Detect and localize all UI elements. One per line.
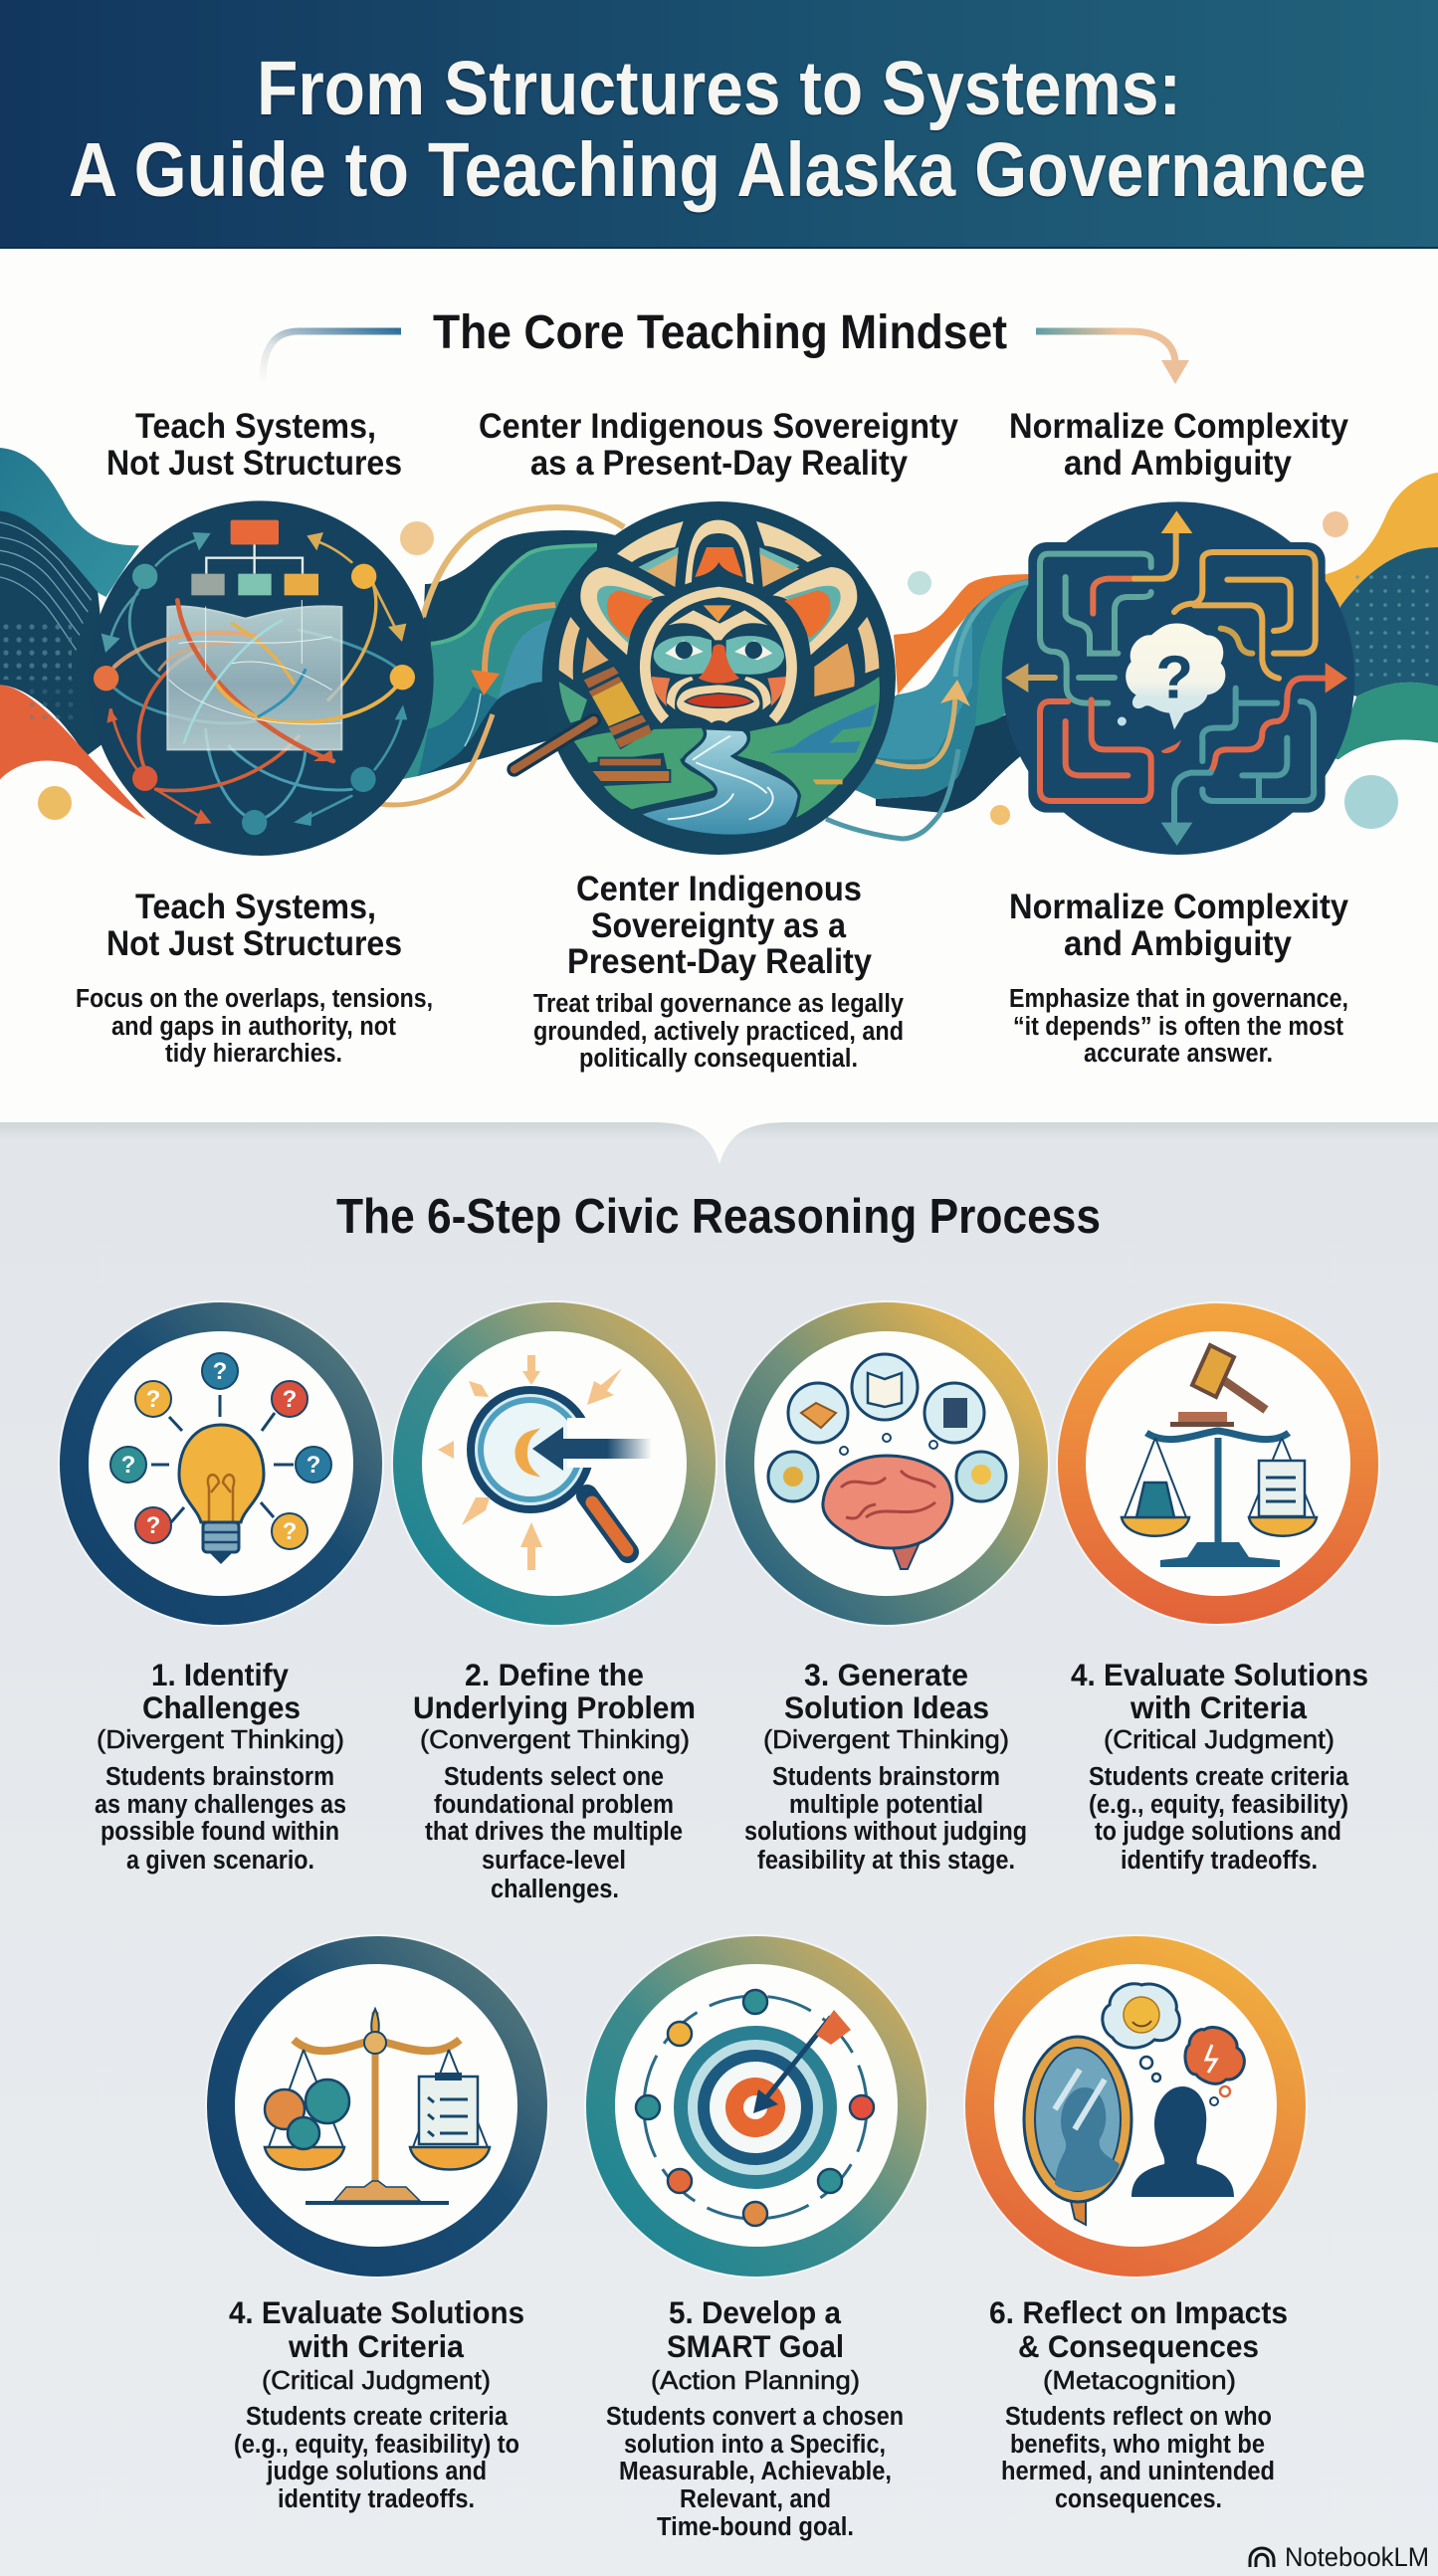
step text column 2: 2. Define the: [465, 1657, 644, 1692]
text block: upper pillar titles: as a Present-Day Reality: [530, 444, 908, 483]
step circle 1: identify challenges lightbulb: ?: [146, 1512, 160, 1539]
step text column 2: surface-level: [482, 1847, 626, 1875]
step circle 1: identify challenges lightbulb: ?: [307, 1452, 320, 1479]
step text column 2: foundational problem: [434, 1791, 674, 1819]
step text column 2: challenges.: [491, 1876, 619, 1903]
step text: evaluate solutions (repeat): 4. Evaluate Solutions: [229, 2294, 524, 2330]
arrow: left heading flourish: [263, 331, 401, 381]
step circle 1: identify challenges lightbulb: [59, 1301, 383, 1626]
step text column 1: Challenges: [142, 1689, 301, 1725]
step circle 3: generate ideas brain: [724, 1301, 1049, 1626]
side lobes: [559, 567, 879, 696]
step text column 3: feasibility at this stage.: [757, 1847, 1015, 1875]
step text column 4: (e.g., equity, feasibility): [1089, 1791, 1348, 1819]
step text: develop SMART goal: (Action Planning): [651, 2365, 860, 2395]
step text: reflect on impacts: 6. Reflect on Impacts: [989, 2294, 1288, 2330]
step text: develop SMART goal: Students convert a chosen: [606, 2403, 904, 2431]
step text column 2: that drives the multiple: [425, 1818, 683, 1846]
heading: six step process: The 6-Step Civic Reasoning Process: [336, 1190, 1101, 1244]
step text: evaluate solutions (repeat): with Criteria: [288, 2328, 464, 2364]
step text: evaluate solutions (repeat): identity tradeoffs.: [278, 2485, 475, 2513]
step text column 1: a given scenario.: [126, 1847, 314, 1875]
text block: pillar descriptions: grounded, actively practiced, and: [533, 1018, 904, 1046]
crown bands: [617, 520, 822, 587]
text block: upper pillar titles: and Ambiguity: [1064, 444, 1292, 483]
step text: evaluate solutions (repeat): Students create criteria: [246, 2403, 509, 2431]
text block: pillar descriptions: accurate answer.: [1084, 1040, 1273, 1068]
icon: systems network circle: [89, 500, 434, 856]
step text column 1: [95, 1657, 346, 1875]
step text: evaluate solutions (repeat): (e.g., equity, feasibility) to: [234, 2431, 519, 2459]
step text: reflect on impacts: benefits, who might be: [1010, 2431, 1265, 2459]
icon: indigenous sovereignty circle: [514, 501, 896, 855]
step circle 1: identify challenges lightbulb: ?: [121, 1452, 135, 1479]
step circle 4b: evaluate scales with spheres: [206, 1935, 548, 2278]
step text: develop SMART goal: solution into a Specific,: [624, 2431, 886, 2459]
step text: reflect on impacts: [989, 2294, 1288, 2513]
text block: upper pillar titles: Normalize Complexity: [1009, 407, 1348, 446]
icon: complexity maze circle: [1002, 501, 1354, 855]
step circle 2: define problem magnifier: [392, 1301, 717, 1626]
step text column 4: (Critical Judgment): [1104, 1724, 1335, 1754]
step text: reflect on impacts: Students reflect on who: [1005, 2403, 1272, 2431]
step text: develop SMART goal: SMART Goal: [667, 2328, 844, 2364]
panel: header banner: [0, 0, 1438, 249]
step text column 2: Students select one: [444, 1763, 664, 1791]
title: [69, 46, 1366, 213]
step text: evaluate solutions (repeat): [229, 2294, 524, 2513]
text block: upper pillar titles: Not Just Structures: [106, 444, 402, 483]
step text column 2: (Convergent Thinking): [420, 1724, 690, 1754]
text block: upper pillar titles: Teach Systems,: [135, 407, 376, 446]
step text: develop SMART goal: Time-bound goal.: [657, 2513, 854, 2541]
step text column 4: with Criteria: [1130, 1689, 1307, 1725]
heading: core teaching mindset: The Core Teaching Mindset: [433, 306, 1007, 359]
text block: pillar descriptions: politically consequential.: [579, 1045, 858, 1073]
text block: pillar descriptions: “it depends” is often the most: [1013, 1013, 1343, 1041]
step text column 4: identify tradeoffs.: [1121, 1847, 1318, 1875]
icon: complexity maze circle: ?: [1155, 643, 1193, 711]
step text: evaluate solutions (repeat): judge solutions and: [266, 2458, 487, 2485]
icon: gavel: [514, 664, 670, 782]
text block: pillar descriptions: and gaps in authority, not: [111, 1013, 396, 1041]
step text column 2: [413, 1657, 696, 1903]
step circle 1: identify challenges lightbulb: ?: [213, 1358, 227, 1385]
step text column 4: [1071, 1657, 1368, 1875]
step text column 3: solutions without judging: [744, 1818, 1027, 1846]
step text column 4: Students create criteria: [1089, 1763, 1349, 1791]
step text column 3: 3. Generate: [804, 1657, 968, 1692]
step text: reflect on impacts: & Consequences: [1018, 2328, 1259, 2364]
step text: reflect on impacts: consequences.: [1055, 2485, 1222, 2513]
text block: lower pillar titles: Not Just Structures: [106, 924, 402, 963]
landscape and river: [559, 677, 880, 836]
step text column 3: multiple potential: [789, 1791, 983, 1819]
arrow: right heading flourish: [1036, 331, 1189, 384]
logo: NotebookLM: NotebookLM: [1285, 2542, 1429, 2572]
step text column 1: possible found within: [101, 1818, 339, 1846]
text block: lower pillar titles: Center Indigenous: [576, 870, 862, 908]
step text column 3: [744, 1657, 1027, 1875]
text block: pillar descriptions: Emphasize that in governance,: [1009, 985, 1348, 1013]
face ring and features: [645, 592, 792, 723]
step text column 1: Students brainstorm: [105, 1763, 334, 1791]
text block: lower pillar titles: Sovereignty as a: [591, 906, 846, 945]
text block: lower pillar titles: and Ambiguity: [1064, 924, 1292, 963]
step circle 6: reflect mirror and person: [964, 1935, 1307, 2278]
step text: reflect on impacts: (Metacognition): [1043, 2365, 1236, 2395]
decorative dots: [38, 511, 1398, 829]
step text column 2: Underlying Problem: [413, 1689, 696, 1725]
title: From Structures to Systems:: [257, 46, 1181, 131]
text block: lower pillar titles: [106, 870, 1348, 981]
step text column 3: Solution Ideas: [784, 1689, 989, 1725]
step text column 4: 4. Evaluate Solutions: [1071, 1657, 1368, 1692]
text block: pillar descriptions: tidy hierarchies.: [165, 1040, 342, 1068]
text block: upper pillar titles: Center Indigenous Sovereignty: [479, 407, 958, 446]
step circle 4: evaluate scales and gavel: [1057, 1302, 1379, 1625]
step text: develop SMART goal: Measurable, Achievable,: [619, 2458, 892, 2485]
step text column 1: as many challenges as: [95, 1791, 346, 1819]
text block: pillar descriptions: [76, 985, 1348, 1073]
text block: lower pillar titles: Present-Day Reality: [567, 942, 872, 981]
step circle 1: identify challenges lightbulb: ?: [146, 1386, 160, 1413]
step text column 3: (Divergent Thinking): [763, 1724, 1009, 1754]
text block: upper pillar titles: [106, 407, 1348, 483]
step text: evaluate solutions (repeat): (Critical Judgment): [262, 2365, 491, 2395]
step circle 5: SMART goal target: [585, 1935, 927, 2278]
step text column 1: 1. Identify: [151, 1657, 289, 1692]
page background: white section: [0, 0, 1438, 1124]
step text: develop SMART goal: Relevant, and: [680, 2485, 831, 2513]
text block: pillar descriptions: Treat tribal governance as legally: [533, 990, 905, 1018]
step text column 1: (Divergent Thinking): [97, 1724, 344, 1754]
step text: reflect on impacts: hermed, and unintended: [1001, 2458, 1275, 2485]
text block: lower pillar titles: Normalize Complexity: [1009, 888, 1348, 926]
step circle 1: identify challenges lightbulb: ?: [283, 1386, 297, 1413]
flowing ribbon waves: [0, 448, 1438, 839]
step text column 3: Students brainstorm: [772, 1763, 1000, 1791]
text block: pillar descriptions: Focus on the overlaps, tensions,: [76, 985, 433, 1013]
step text column 4: to judge solutions and: [1095, 1818, 1341, 1846]
text block: lower pillar titles: Teach Systems,: [135, 888, 376, 926]
step circle 1: identify challenges lightbulb: ?: [283, 1518, 297, 1545]
panel: process section background: [0, 1122, 1438, 2576]
step text: develop SMART goal: [606, 2294, 904, 2541]
step text: develop SMART goal: 5. Develop a: [669, 2294, 841, 2330]
